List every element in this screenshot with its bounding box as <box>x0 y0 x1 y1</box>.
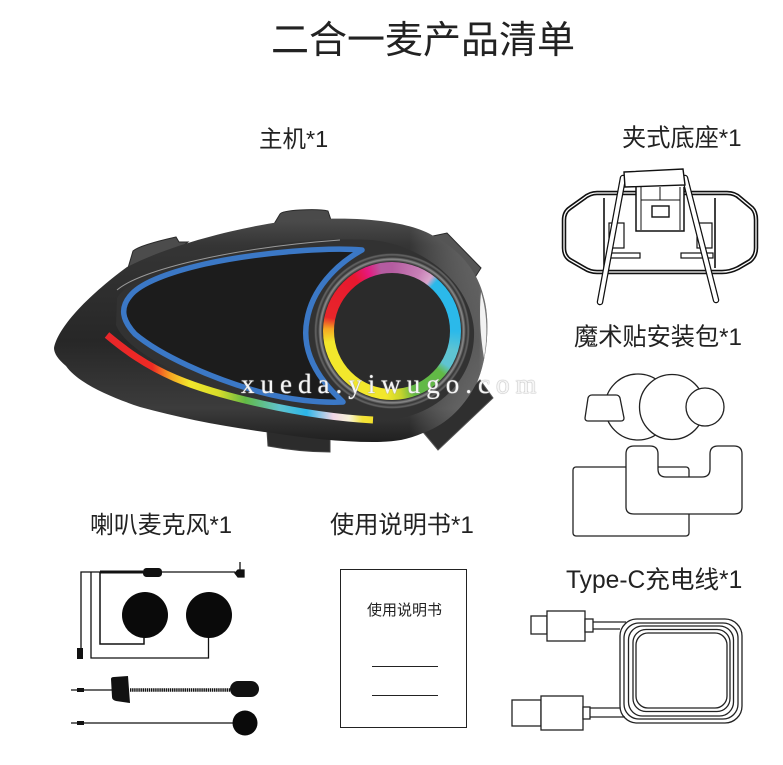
manual <box>340 570 466 728</box>
clip mount <box>564 169 756 302</box>
mount frame <box>564 193 756 272</box>
label: speaker mic: 喇叭麦克风*1 <box>90 512 232 539</box>
lower wires <box>590 708 625 717</box>
label: manual: 使用说明书*1 <box>330 512 474 539</box>
rainbow strip <box>107 335 373 420</box>
lower plug <box>512 700 541 726</box>
rectangular pad <box>573 467 689 536</box>
bottom button <box>267 431 330 452</box>
right button <box>433 233 481 282</box>
upper wires <box>593 622 626 629</box>
wires <box>81 572 235 648</box>
blue light outline <box>124 249 362 402</box>
speaker right <box>186 592 232 638</box>
jack plug <box>235 562 244 577</box>
watermark: xueda.yiwugo.com <box>241 369 542 399</box>
top cap <box>624 169 685 187</box>
usb port block <box>423 380 493 450</box>
boom mic <box>71 676 259 703</box>
speaker left <box>122 592 168 638</box>
label: main unit: 主机*1 <box>259 126 328 152</box>
wired mic <box>71 710 258 736</box>
edge highlight sliver <box>480 292 486 358</box>
frame inner lines <box>604 198 715 268</box>
dial center <box>334 273 450 389</box>
cable coil <box>620 619 742 723</box>
label: clip mount: 夹式底座*1 <box>622 125 742 152</box>
side tabs <box>609 223 624 248</box>
label: type-c cable: Type-C充电线*1 <box>566 567 742 594</box>
round pads <box>605 374 671 440</box>
spring legs <box>600 178 623 302</box>
label: velcro kit: 魔术贴安装包*1 <box>574 324 742 351</box>
velcro kit <box>573 374 742 536</box>
edge shading <box>54 219 487 442</box>
connector block <box>77 648 83 659</box>
upper plug <box>531 616 547 634</box>
top button <box>274 210 338 224</box>
panel highlight <box>117 240 340 290</box>
manual lines <box>372 666 438 696</box>
body shell <box>54 219 487 442</box>
u-shaped pad <box>626 446 742 514</box>
rainbow dial ring <box>323 262 461 400</box>
type-c cable <box>512 611 742 730</box>
left button <box>128 237 188 268</box>
chrome bezel <box>314 253 470 409</box>
title: 二合一麦产品清单 <box>271 20 575 62</box>
trapezoid pad <box>585 395 624 421</box>
center clip <box>636 187 684 231</box>
manual page title: 使用说明书 <box>367 602 442 619</box>
manual page <box>340 570 466 728</box>
face panel <box>116 239 474 420</box>
inline connector <box>143 568 162 577</box>
speaker and mic set <box>71 562 259 736</box>
